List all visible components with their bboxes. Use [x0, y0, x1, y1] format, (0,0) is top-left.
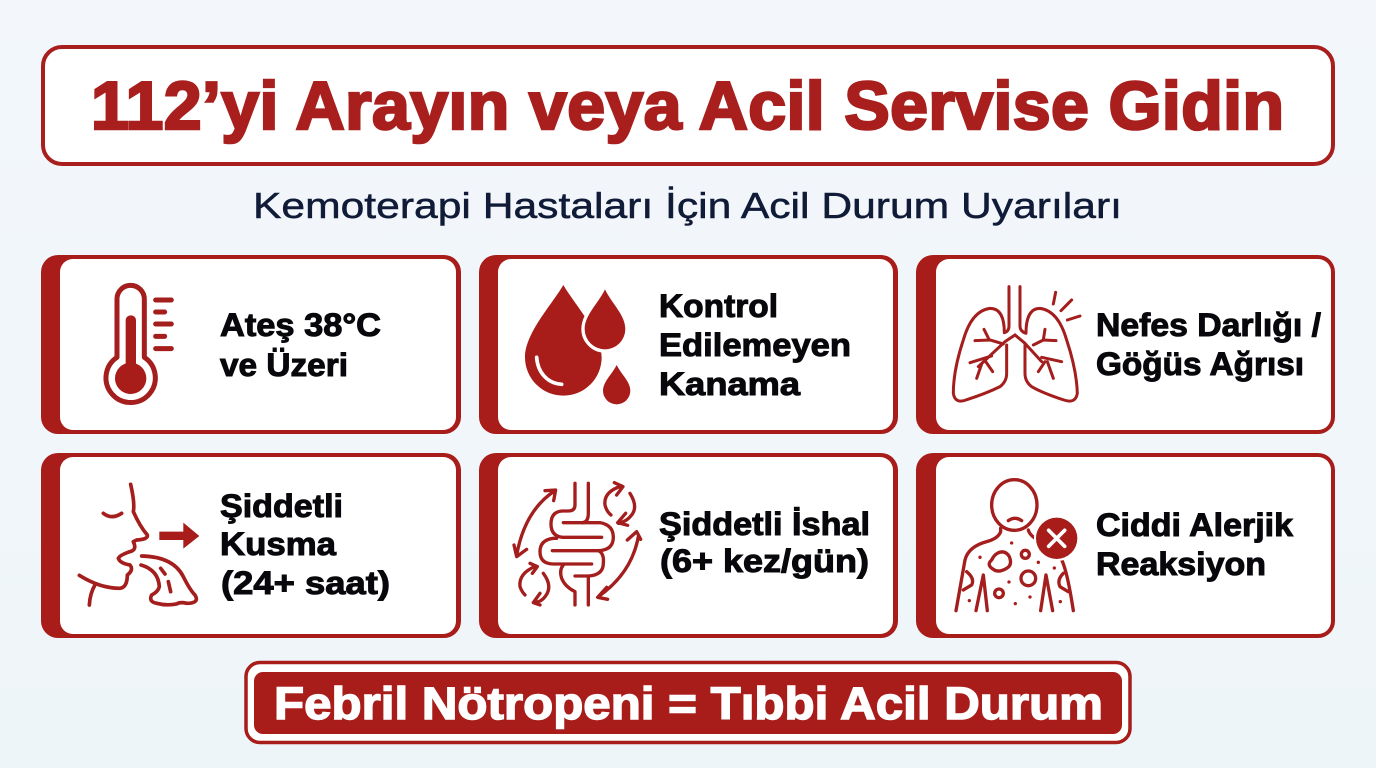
text: allergy: Ciddi Alerjik — [1096, 507, 1293, 543]
panel: fever — [41, 255, 461, 434]
text: diarrhea — [659, 506, 870, 579]
subtitle: Kemoterapi Hastaları İçin Acil Durum Uyarıları — [253, 185, 1122, 226]
text: fever: Ateş 38°C — [220, 307, 381, 343]
text: fever: ve Üzeri — [220, 347, 348, 383]
text: vomiting: (24+ saat) — [221, 565, 390, 601]
icon: blood drops — [525, 285, 630, 404]
text: vomiting: Kusma — [220, 526, 336, 562]
icon: lungs — [953, 287, 1080, 401]
panel: vomiting — [41, 453, 461, 638]
text: breathing — [1096, 307, 1321, 382]
text: diarrhea: (6+ kez/gün) — [660, 543, 869, 579]
icon: vomiting face — [79, 484, 199, 605]
icon: allergic reaction body — [956, 480, 1077, 611]
text: diarrhea: Şiddetli İshal — [659, 506, 870, 542]
text: allergy — [1096, 507, 1293, 582]
text: breathing: Nefes Darlığı / — [1096, 307, 1321, 343]
panel: breathing — [916, 255, 1335, 434]
text: vomiting — [220, 488, 390, 601]
text: bleeding: Edilemeyen — [659, 327, 851, 363]
icon: thermometer — [106, 285, 171, 403]
text: fever — [220, 307, 381, 383]
text: breathing: Göğüs Ağrısı — [1096, 346, 1304, 382]
title banner — [43, 47, 1333, 164]
icon: intestines with arrows — [514, 483, 641, 605]
title banner: 112’yi Arayın veya Acil Servise Gidin — [91, 68, 1284, 144]
text: allergy: Reaksiyon — [1096, 546, 1266, 582]
panel: diarrhea — [479, 453, 898, 638]
text: bleeding: Kontrol — [659, 288, 778, 324]
text: bleeding: Kanama — [659, 366, 800, 402]
footer banner: Febril Nötropeni = Tıbbi Acil Durum — [274, 678, 1103, 729]
text: bleeding — [659, 288, 851, 402]
panel: allergy — [916, 453, 1335, 638]
panel: bleeding — [479, 255, 898, 434]
footer banner — [246, 662, 1130, 742]
text: vomiting: Şiddetli — [220, 488, 343, 524]
